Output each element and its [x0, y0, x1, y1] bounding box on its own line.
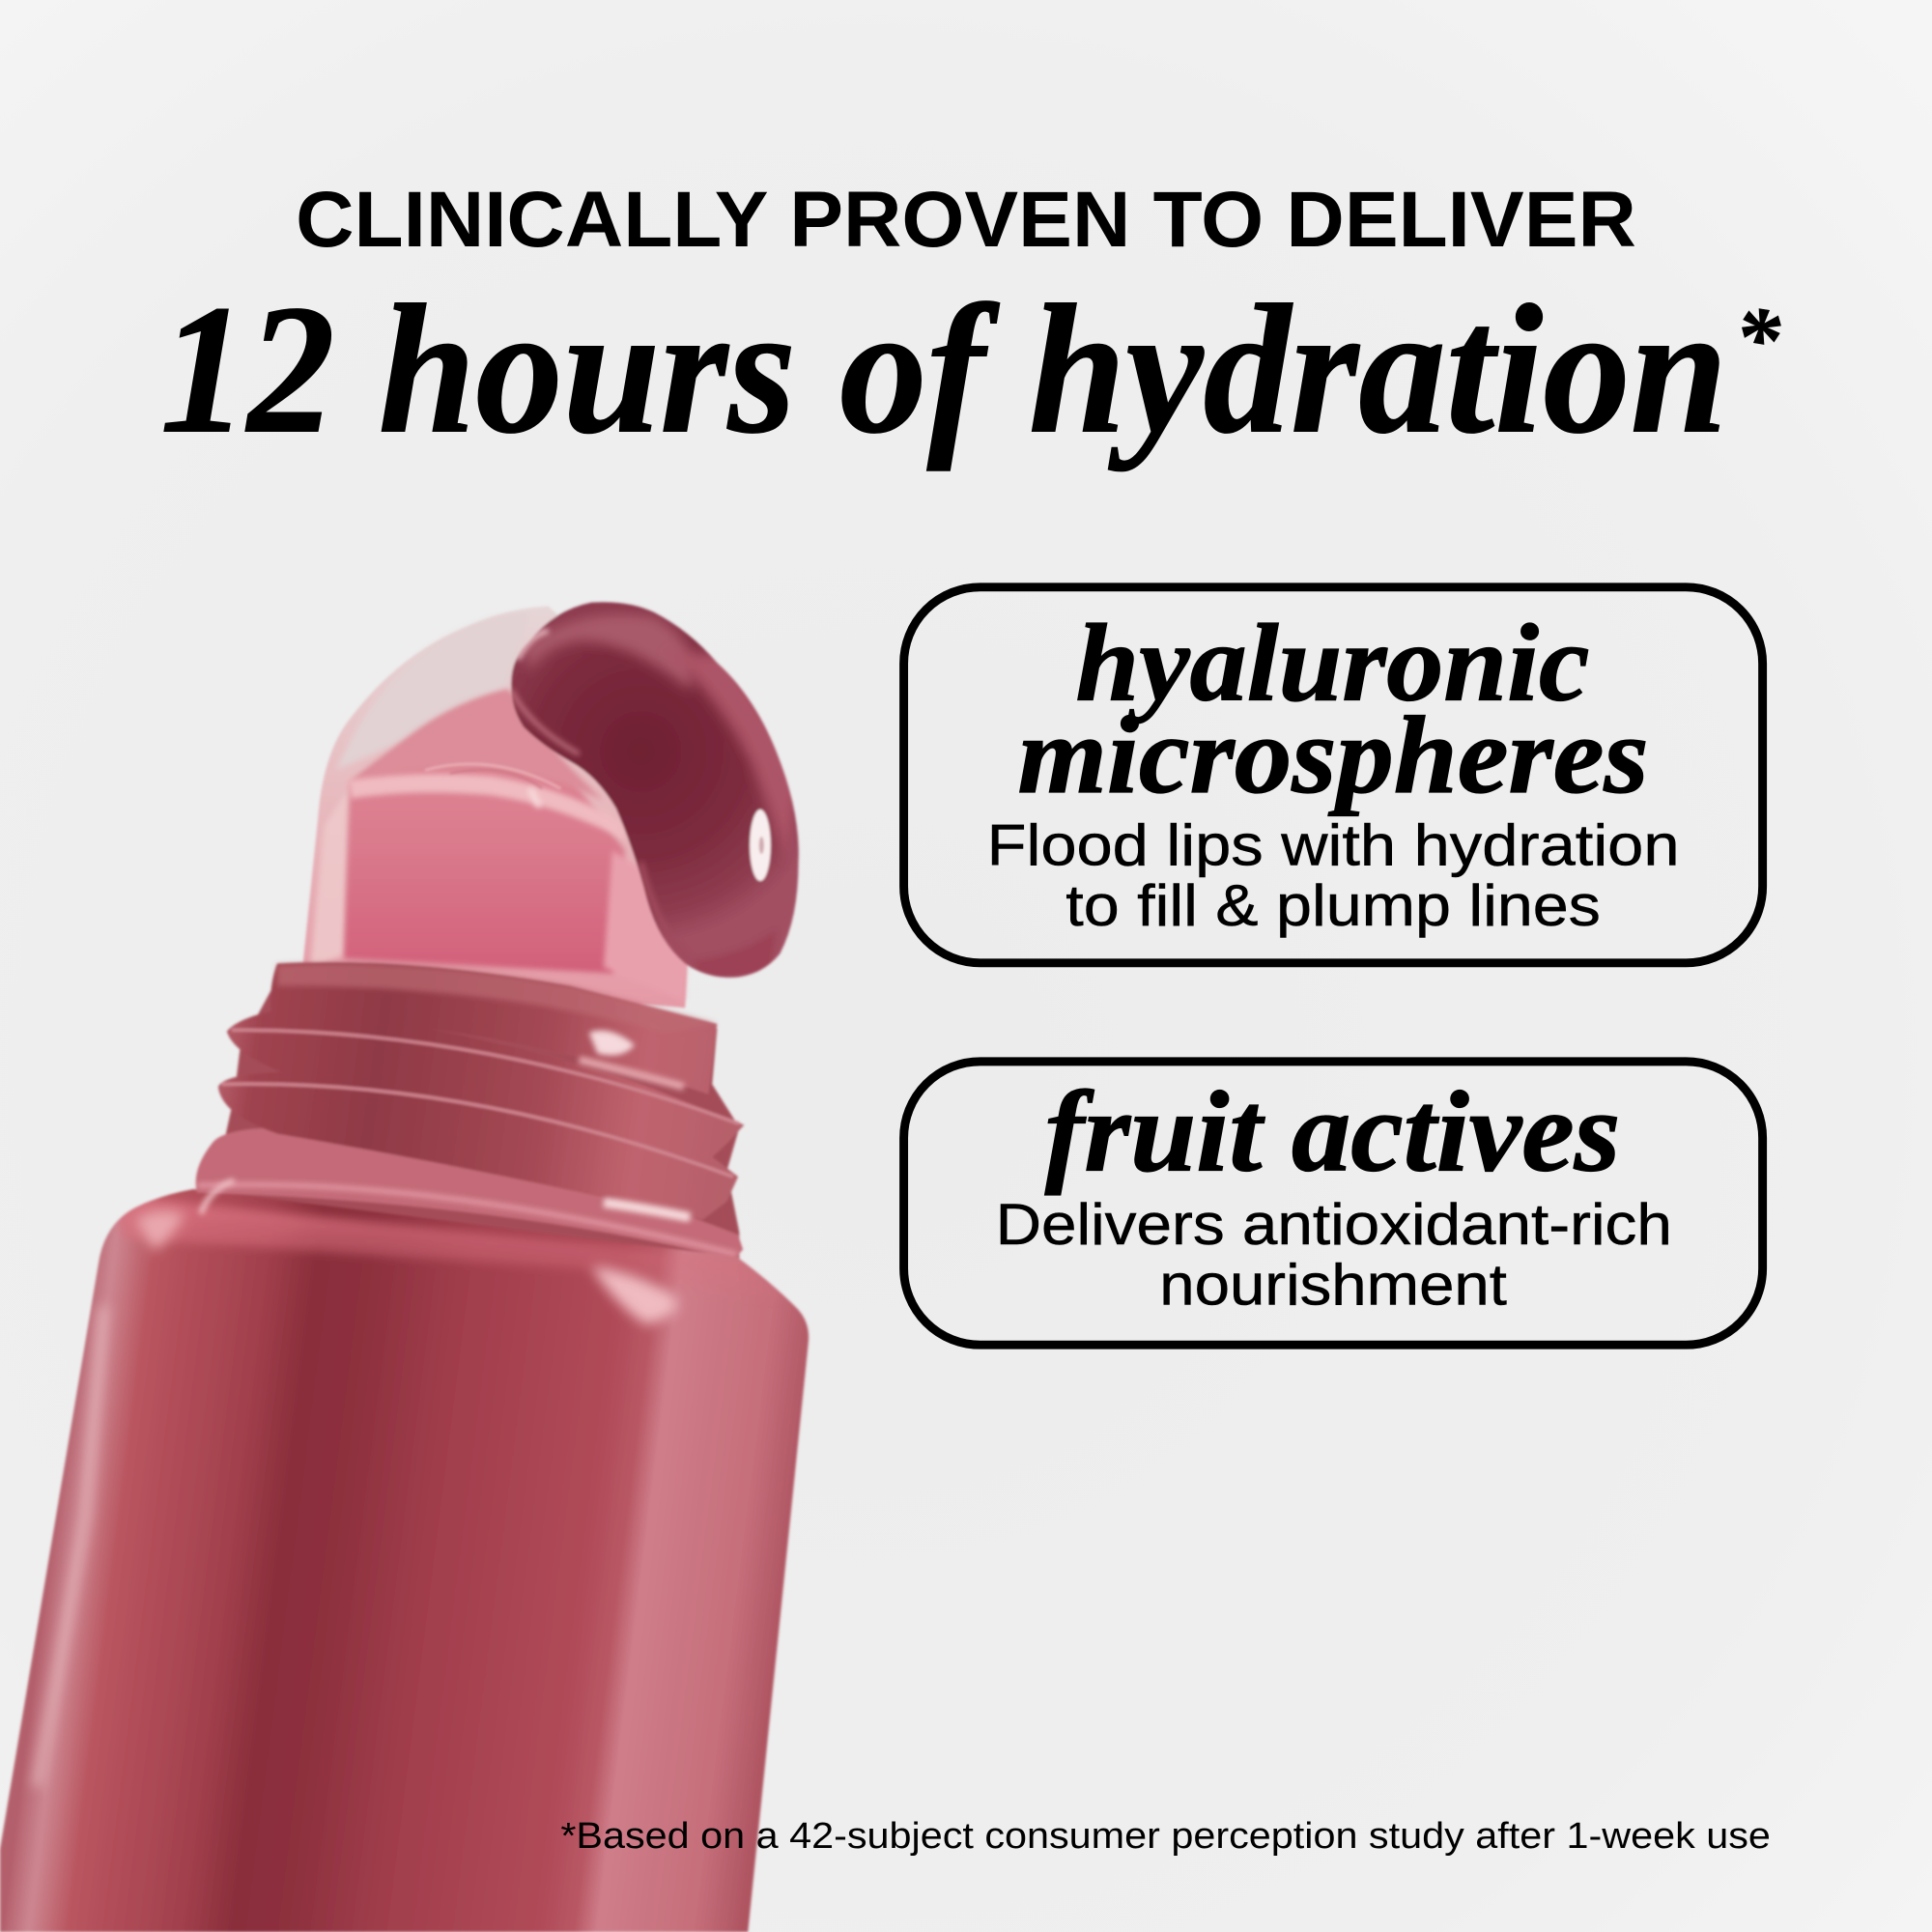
title asterisk: * [1735, 290, 1781, 390]
panel body line 2: nourishment [1159, 1253, 1507, 1318]
neck backing behind threads [191, 985, 739, 1269]
gloss highlight [750, 810, 771, 881]
thread 4 [196, 1127, 743, 1260]
panel: fruit actives [904, 1062, 1763, 1345]
panel heading: hyaluronic: hyaluronic [1076, 601, 1589, 724]
gloss glob [511, 602, 801, 980]
thread 3 [218, 1072, 738, 1220]
panel body line 2: to fill & plump lines [1065, 873, 1601, 938]
title: 12 hours of hydration [160, 268, 1727, 471]
panel heading: microspheres: microspheres [1018, 694, 1649, 816]
collar ring [270, 962, 717, 1094]
heading: CLINICALLY PROVEN TO DELIVER [296, 176, 1636, 264]
clear applicator tip [301, 607, 691, 1008]
panel heading: fruit actives: fruit actives [1045, 1067, 1620, 1196]
thread 2 [227, 1010, 744, 1161]
panel: hyaluronic microspheres [904, 587, 1763, 963]
panel body line 1: Delivers antioxidant-rich [996, 1192, 1672, 1257]
pink product inside tip [344, 690, 686, 1001]
tube body [0, 1189, 809, 1932]
footnote: *Based on a 42-subject consumer perception study after 1-week use [560, 1815, 1771, 1857]
panel body line 1: Flood lips with hydration [987, 812, 1680, 877]
screw threads [196, 962, 744, 1260]
product photo: lip gloss tube [0, 602, 809, 1932]
